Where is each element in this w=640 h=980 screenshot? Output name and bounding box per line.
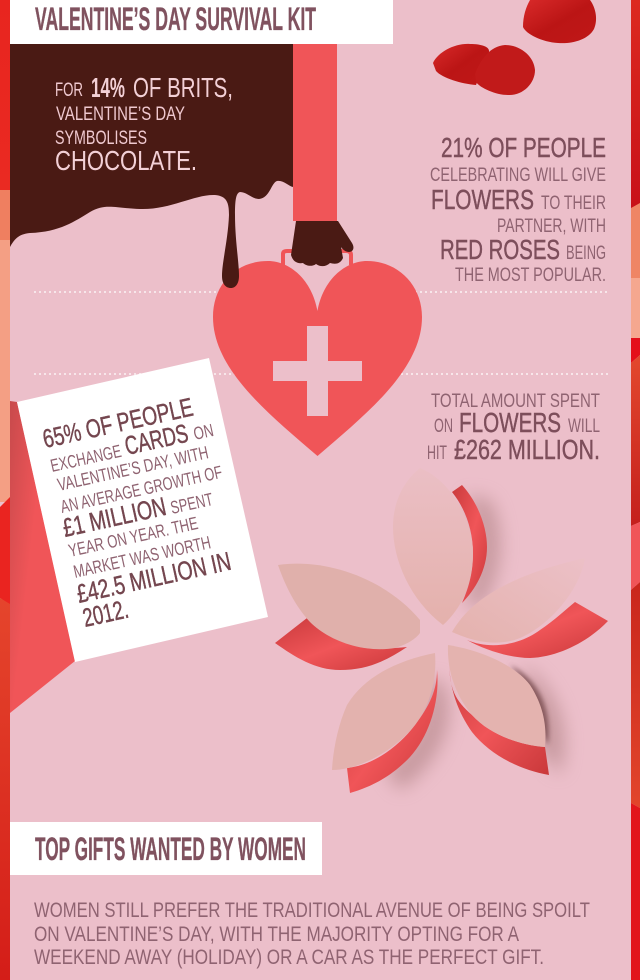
title: VALENTINE’S DAY SURVIVAL KIT bbox=[35, 1, 316, 37]
section band bbox=[10, 822, 322, 875]
top petal bbox=[393, 468, 473, 625]
flowers spend text block: FLOWERS bbox=[459, 407, 561, 438]
petal bbox=[523, 0, 596, 43]
card text bbox=[40, 392, 234, 633]
card text: EXCHANGE bbox=[49, 441, 123, 476]
card text: VALENTINE’S DAY, WITH bbox=[56, 442, 210, 495]
chocolate text bbox=[55, 72, 233, 176]
flowers text block: RED ROSES bbox=[440, 234, 560, 265]
card text: £42.5 MILLION IN bbox=[74, 546, 234, 609]
left decorative strip bbox=[0, 0, 10, 980]
flowers spend text block: HIT bbox=[427, 443, 447, 464]
flowers spend text block: TOTAL AMOUNT SPENT bbox=[431, 391, 600, 412]
dotted dividers bbox=[34, 292, 608, 374]
card text: AN AVERAGE GROWTH OF bbox=[59, 462, 224, 517]
petal bbox=[475, 45, 535, 95]
card text: MARKET WAS WORTH bbox=[72, 532, 213, 582]
flowers text block bbox=[430, 132, 606, 286]
rose petals bbox=[433, 0, 596, 95]
heart bbox=[213, 261, 422, 456]
title band bbox=[10, 0, 393, 44]
cross bbox=[273, 326, 362, 416]
handle bbox=[283, 251, 351, 265]
lower left petal bbox=[332, 653, 435, 770]
lower left petal sliver bbox=[347, 670, 438, 793]
right petal bbox=[452, 558, 585, 643]
card text: £1 MILLION bbox=[60, 491, 169, 543]
heart first aid kit bbox=[213, 251, 422, 456]
right petal sliver bbox=[467, 602, 608, 658]
card text: YEAR ON YEAR. THE bbox=[67, 513, 200, 561]
melting chocolate bbox=[10, 44, 293, 288]
lower right petal bbox=[448, 645, 545, 747]
top petal sliver bbox=[452, 485, 487, 603]
card text: SPENT bbox=[169, 489, 215, 518]
flowers text block: BEING bbox=[566, 243, 606, 264]
chocolate text: 14% bbox=[91, 72, 125, 103]
section paragraph bbox=[34, 899, 590, 969]
paper flower bbox=[275, 468, 608, 793]
chocolate text: FOR bbox=[55, 80, 83, 101]
arm bbox=[293, 44, 337, 221]
flower shadows bbox=[385, 495, 565, 790]
card text: CARDS bbox=[122, 418, 191, 461]
flowers text block: FLOWERS bbox=[431, 184, 534, 215]
chocolate text: CHOCOLATE. bbox=[55, 145, 197, 176]
flowers spend text block: £262 MILLION. bbox=[454, 434, 600, 465]
chocolate panel bbox=[10, 44, 293, 288]
chocolate text: OF BRITS, bbox=[133, 72, 233, 103]
card panel bbox=[17, 358, 268, 662]
card text: 2012. bbox=[80, 594, 131, 633]
chocolate text: SYMBOLISES bbox=[55, 128, 147, 149]
flowers spend text block: ON bbox=[434, 416, 453, 437]
lower right petal sliver bbox=[449, 663, 549, 775]
left petal bbox=[278, 564, 420, 649]
card text: ON bbox=[192, 420, 215, 444]
chocolate text: VALENTINE’S DAY bbox=[56, 104, 185, 125]
flowers text block: TO THEIR bbox=[541, 193, 606, 214]
flowers spend text block bbox=[427, 391, 600, 465]
section paragraph: ON VALENTINE’S DAY, WITH THE MAJORITY OPTING FOR A bbox=[34, 923, 519, 946]
left petal sliver bbox=[275, 618, 407, 670]
red fold behind card bbox=[10, 401, 75, 713]
flowers spend text block: WILL bbox=[568, 416, 600, 437]
section heading: TOP GIFTS WANTED BY WOMEN bbox=[35, 831, 306, 867]
hand bbox=[291, 221, 353, 266]
petal bbox=[433, 44, 489, 85]
right decorative strip bbox=[631, 0, 640, 980]
card text: 65% OF PEOPLE bbox=[40, 392, 196, 454]
